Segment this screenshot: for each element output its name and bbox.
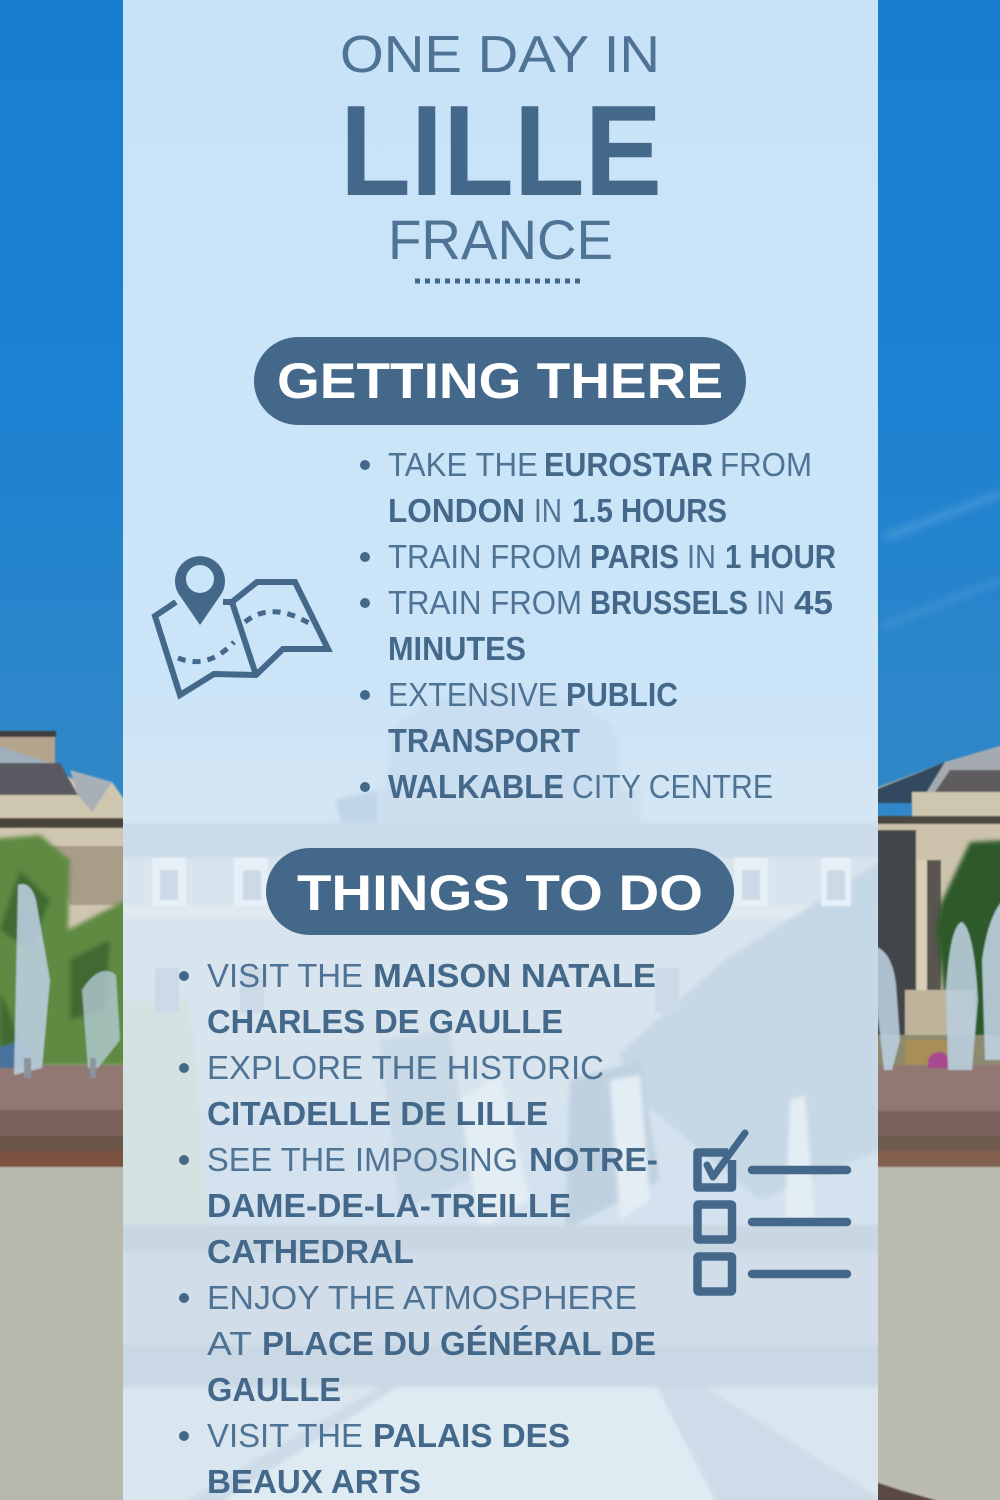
bullet item: Eurostar: FROM bbox=[720, 446, 812, 483]
bullet item: Maison Natale: CHARLES DE GAULLE bbox=[207, 1003, 563, 1040]
bullet item: Maison Natale: VISIT THE bbox=[207, 957, 363, 994]
bullet item: Eurostar: EUROSTAR bbox=[544, 446, 713, 483]
bullet item: Maison Natale bbox=[179, 957, 656, 1040]
bullet item: cathedral bbox=[179, 1141, 658, 1270]
bullet item: Palais des Beaux Arts: PALAIS DES bbox=[373, 1417, 570, 1454]
bullet item: Eurostar: TAKE THE bbox=[388, 446, 538, 483]
bullet item: Citadelle: CITADELLE DE LILLE bbox=[207, 1095, 548, 1132]
bullet item: Brussels bbox=[360, 584, 833, 667]
bullet item: Paris: PARIS bbox=[590, 538, 679, 575]
bullet item: Citadelle: EXPLORE THE HISTORIC bbox=[207, 1049, 604, 1086]
title line: Lille: LILLE bbox=[340, 79, 662, 223]
translucent central panel bbox=[123, 0, 878, 1500]
bullet item: Place du Général de Gaulle: AT bbox=[207, 1325, 252, 1362]
list: getting there bbox=[360, 446, 836, 805]
bullet item: Eurostar bbox=[360, 446, 812, 529]
bullet item: cathedral: CATHEDRAL bbox=[207, 1233, 414, 1270]
bullet item: Eurostar: 1.5 HOURS bbox=[572, 492, 727, 529]
bullet item: public transport: PUBLIC bbox=[566, 676, 678, 713]
bullet item: Paris: 1 HOUR bbox=[725, 538, 836, 575]
bullet item: Palais des Beaux Arts: BEAUX ARTS bbox=[207, 1463, 421, 1500]
bullet item: Place du Général de Gaulle: PLACE DU GÉNÉRAL DE bbox=[262, 1325, 656, 1362]
faded photo inside panel bbox=[123, 766, 878, 1500]
bullet item: Palais des Beaux Arts bbox=[179, 1417, 570, 1500]
bullet item: Paris: TRAIN FROM bbox=[388, 538, 582, 575]
bullet item: Maison Natale: MAISON NATALE bbox=[373, 957, 656, 994]
bullet item: Palais des Beaux Arts: VISIT THE bbox=[207, 1417, 363, 1454]
bullet item: walkable: WALKABLE bbox=[388, 768, 564, 805]
icon: checklist bbox=[698, 1133, 847, 1292]
bullet item: public transport: TRANSPORT bbox=[388, 722, 580, 759]
bullet item: Eurostar: LONDON bbox=[388, 492, 525, 529]
bullet item: cathedral: DAME-DE-LA-TREILLE bbox=[207, 1187, 571, 1224]
bullet item: Paris: IN bbox=[687, 538, 716, 575]
list: things to do bbox=[179, 957, 658, 1500]
bullet item: Brussels: BRUSSELS bbox=[590, 584, 748, 621]
bullet item: public transport: EXTENSIVE bbox=[388, 676, 558, 713]
icon: map with location pin bbox=[155, 556, 328, 695]
bullet item: public transport bbox=[360, 676, 678, 759]
bullet item: cathedral: SEE THE IMPOSING bbox=[207, 1141, 518, 1178]
title line: one day in: ONE DAY IN bbox=[340, 26, 660, 84]
bullet item: Place du Général de Gaulle bbox=[179, 1279, 656, 1408]
bullet item: walkable bbox=[360, 768, 773, 805]
heading: things to do bbox=[266, 848, 734, 935]
heading: things to do: THINGS TO DO bbox=[297, 865, 703, 921]
bullet item: Place du Général de Gaulle: ENJOY THE ATMOSPHERE bbox=[207, 1279, 637, 1316]
bullet item: Citadelle bbox=[179, 1049, 604, 1132]
bullet item: Brussels: 45 bbox=[794, 584, 833, 621]
bullet item: walkable: CITY CENTRE bbox=[572, 768, 773, 805]
bullet item: Brussels: TRAIN FROM bbox=[388, 584, 582, 621]
bullet item: Brussels: IN bbox=[756, 584, 785, 621]
bullet item: Paris bbox=[360, 538, 836, 575]
heading: getting there bbox=[254, 337, 746, 425]
bullet item: Brussels: MINUTES bbox=[388, 630, 526, 667]
title block bbox=[340, 26, 662, 271]
bullet item: Eurostar: IN bbox=[534, 492, 562, 529]
title line: France: FRANCE bbox=[388, 208, 613, 271]
bullet item: cathedral: NOTRE- bbox=[529, 1141, 658, 1178]
bullet item: Place du Général de Gaulle: GAULLE bbox=[207, 1371, 341, 1408]
heading: getting there: GETTING THERE bbox=[277, 353, 723, 409]
